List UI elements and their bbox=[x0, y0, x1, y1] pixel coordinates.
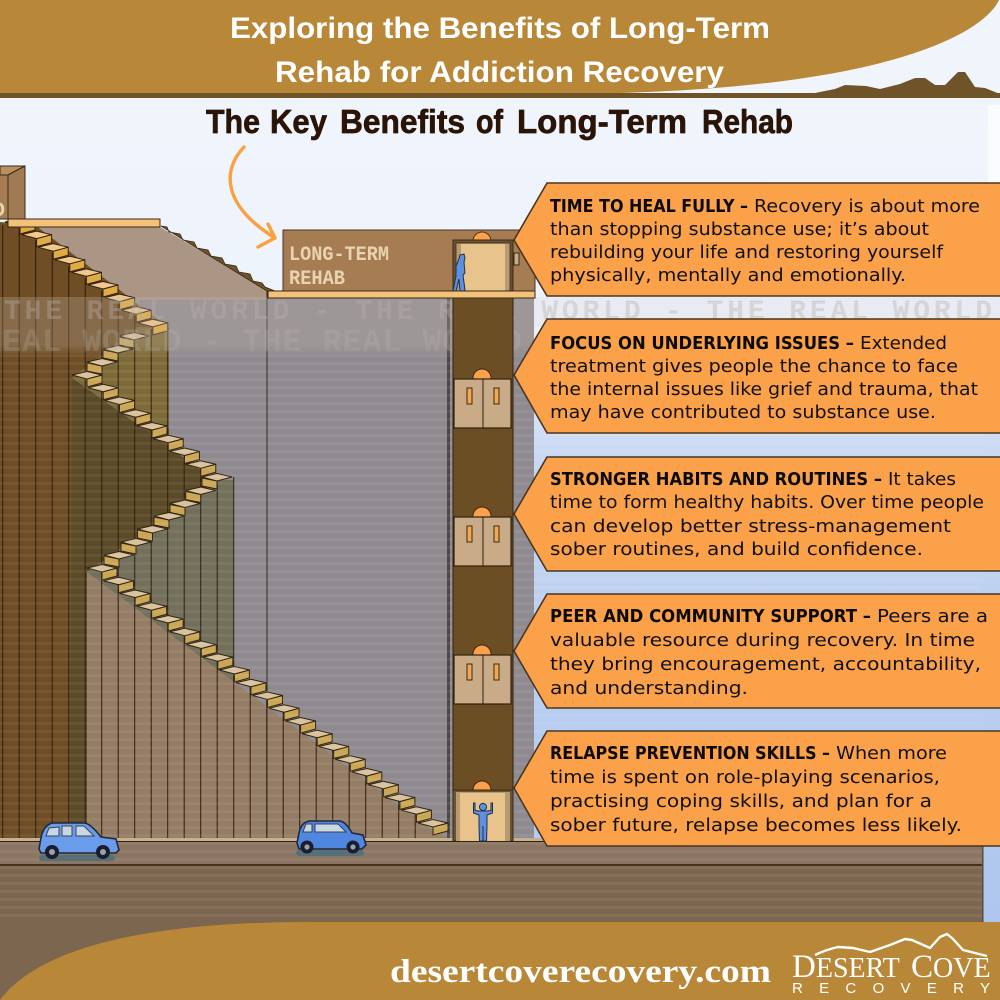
panel: relapse prevention skills: sober future, relapse becomes less likely. bbox=[550, 815, 962, 836]
panel: focus on underlying issues: may have contributed to substance use. bbox=[550, 402, 936, 423]
panel: time to heal fully: Recovery is about more bbox=[754, 196, 980, 217]
floor platform bbox=[268, 291, 535, 298]
logo: Desert Cove Recovery: DESERT bbox=[792, 949, 900, 985]
section heading: Rehab bbox=[702, 103, 793, 140]
car left bbox=[39, 823, 119, 861]
slope steps silhouette bbox=[161, 226, 275, 291]
panel: time to heal fully: TIME TO HEAL FULLY – bbox=[550, 197, 748, 217]
footer banner bbox=[0, 922, 1000, 1000]
section heading: Benefits bbox=[340, 103, 465, 140]
closed elevator door 2 bbox=[454, 507, 511, 566]
staircase structure bbox=[0, 218, 449, 838]
wall texture stripes bbox=[0, 355, 982, 922]
elevator shaft bbox=[453, 298, 513, 790]
top-left tower building bbox=[0, 166, 25, 223]
white margin strip bbox=[988, 105, 1000, 195]
title: Exploring the Benefits of Long-Term bbox=[230, 12, 770, 45]
panel: relapse prevention skills: practising coping skills, and plan for a bbox=[550, 791, 932, 812]
panel: stronger habits and routines: STRONGER HABITS AND ROUTINES – bbox=[550, 470, 882, 490]
panel: focus on underlying issues: FOCUS ON UNDERLYING ISSUES – bbox=[550, 334, 854, 354]
panel: relapse prevention skills: When more bbox=[836, 743, 947, 764]
panel: focus on underlying issues bbox=[514, 319, 1000, 433]
closed elevator door 3 bbox=[454, 645, 511, 704]
ground and road bbox=[0, 838, 984, 1000]
arrow bbox=[230, 147, 275, 247]
closed elevator door 1 bbox=[454, 369, 511, 428]
logo: Desert Cove Recovery: RECOVERY bbox=[792, 980, 990, 997]
panel: time to heal fully: than stopping substance use; it’s about bbox=[550, 219, 929, 240]
the real world fog band bbox=[0, 297, 1000, 361]
panel: peer and community support: PEER AND COMMUNITY SUPPORT – bbox=[550, 607, 871, 627]
header mountains bbox=[700, 72, 1000, 98]
top elevator door bbox=[453, 232, 519, 291]
title: Rehab for Addiction Recovery bbox=[275, 56, 725, 89]
section heading bbox=[206, 103, 793, 140]
panel: time to heal fully: rebuilding your life and restoring yourself bbox=[550, 242, 944, 263]
panel: time to heal fully bbox=[514, 183, 1000, 296]
the real world fog band: REAL WORLD - THE REAL WORLD - THE R bbox=[0, 324, 683, 361]
panel: relapse prevention skills: RELAPSE PREVENTION SKILLS – bbox=[550, 744, 830, 764]
section heading: The bbox=[206, 103, 260, 140]
panel: focus on underlying issues: Extended bbox=[860, 333, 947, 354]
panel: stronger habits and routines: sober routines, and build confidence. bbox=[550, 539, 923, 560]
section heading: Key bbox=[270, 103, 328, 140]
title bbox=[230, 12, 770, 89]
panel: focus on underlying issues: treatment gives people the chance to face bbox=[550, 356, 958, 377]
long-term rehab building: LONG-TERM bbox=[289, 244, 389, 267]
tower wall bbox=[0, 297, 534, 840]
panel: stronger habits and routines: can develop better stress-management bbox=[550, 516, 951, 537]
upper platform bbox=[8, 219, 160, 227]
footer website: desertcoverecovery.com bbox=[390, 954, 771, 990]
car right bbox=[296, 821, 366, 856]
panel: peer and community support bbox=[514, 594, 1000, 708]
hillside bbox=[36, 227, 267, 300]
long-term rehab building: REHAB bbox=[289, 268, 345, 291]
panel: peer and community support: they bring encouragement, accountability, bbox=[550, 654, 981, 675]
section heading: Long-Term bbox=[517, 103, 687, 140]
panel: relapse prevention skills bbox=[514, 731, 1000, 846]
panel: peer and community support: Peers are a bbox=[877, 606, 988, 627]
panel: stronger habits and routines: It takes bbox=[888, 469, 956, 490]
panel: focus on underlying issues: the internal issues like grief and trauma, that bbox=[550, 379, 978, 400]
header base line bbox=[0, 93, 1000, 98]
panel: peer and community support: valuable resource during recovery. In time bbox=[550, 630, 975, 651]
panel: relapse prevention skills: time is spent on role-playing scenarios, bbox=[550, 767, 940, 788]
logo: Desert Cove Recovery bbox=[792, 934, 991, 997]
panel: stronger habits and routines bbox=[514, 457, 1000, 571]
icon: person walking into elevator bbox=[453, 254, 465, 292]
long-term rehab building bbox=[283, 230, 535, 291]
logo: Desert Cove Recovery: COVE bbox=[911, 949, 991, 985]
header banner bbox=[0, 0, 999, 93]
bottom elevator with person bbox=[453, 781, 513, 841]
panel: peer and community support: and understanding. bbox=[550, 678, 748, 699]
the real world fog band: THE REAL WORLD - THE REAL WORLD - THE REAL WORLD bbox=[4, 297, 992, 328]
panel: stronger habits and routines: time to form healthy habits. Over time people bbox=[550, 492, 984, 513]
section heading: of bbox=[476, 103, 504, 140]
panel: time to heal fully: physically, mentally and emotionally. bbox=[550, 265, 906, 286]
